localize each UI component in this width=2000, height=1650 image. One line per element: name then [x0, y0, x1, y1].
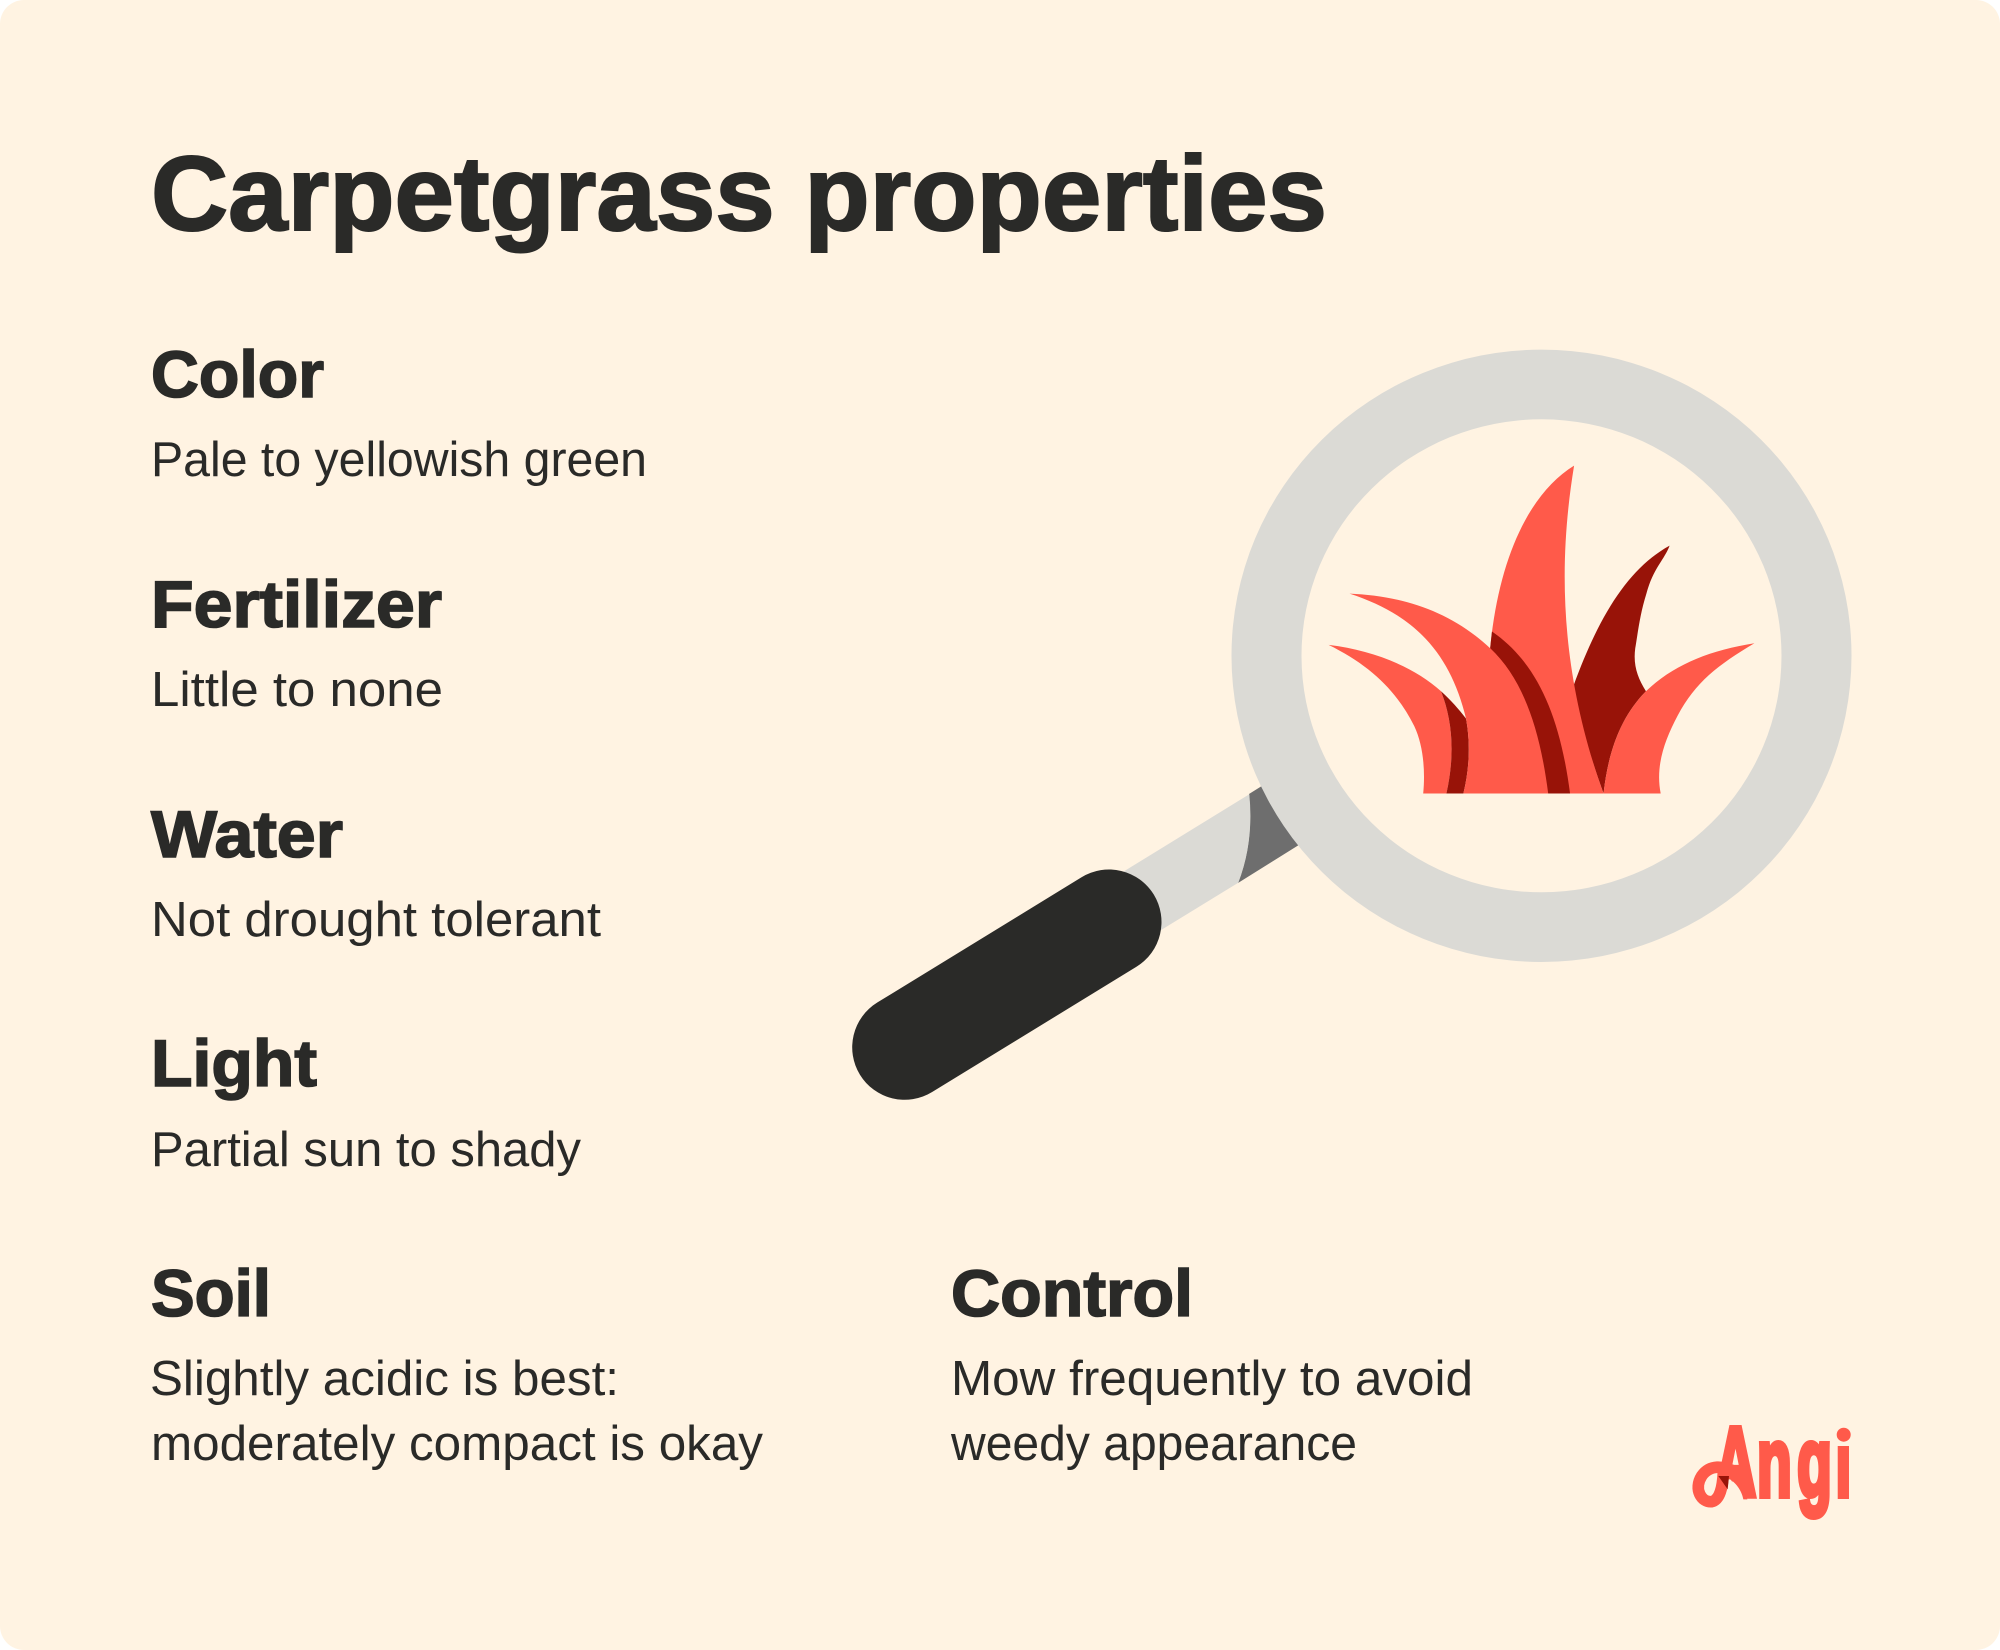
text: control value: Mow frequently to avoid — [951, 1352, 1473, 1406]
text: control value — [950, 1352, 1473, 1471]
heading: light: Light — [151, 1026, 317, 1100]
text: water value: Not drought tolerant — [151, 893, 601, 947]
property: color — [151, 337, 647, 487]
heading: color: Color — [151, 337, 324, 411]
illustration: magnifying glass over grass — [905, 350, 1852, 1047]
property: fertilizer — [151, 567, 443, 717]
property: control — [950, 1256, 1473, 1471]
heading: water: Water — [151, 797, 343, 871]
text: soil value: moderately compact is okay — [151, 1417, 763, 1471]
heading: soil: Soil — [151, 1256, 271, 1330]
property: soil — [150, 1256, 763, 1471]
text: color value: Pale to yellowish green — [151, 433, 647, 487]
text: fertilizer value: Little to none — [151, 663, 443, 717]
heading: fertilizer: Fertilizer — [151, 567, 442, 641]
text: light value: Partial sun to shady — [151, 1123, 581, 1177]
text: soil value — [150, 1352, 763, 1471]
icon: magnifier ring — [1232, 350, 1852, 962]
heading: control: Control — [951, 1256, 1193, 1330]
property: light — [151, 1026, 581, 1177]
title: Carpetgrass properties — [151, 135, 1327, 253]
text: control value: weedy appearance — [950, 1417, 1357, 1471]
icon: grass — [1329, 466, 1754, 794]
logo: Angi: Angi — [1715, 1407, 1851, 1517]
icon: magnifier neck shadow — [1238, 784, 1310, 883]
property: water — [151, 797, 601, 947]
text: soil value: Slightly acidic is best: — [150, 1352, 619, 1406]
icon: magnifier shaft — [1100, 794, 1250, 943]
icon: magnifier handle — [905, 922, 1109, 1047]
